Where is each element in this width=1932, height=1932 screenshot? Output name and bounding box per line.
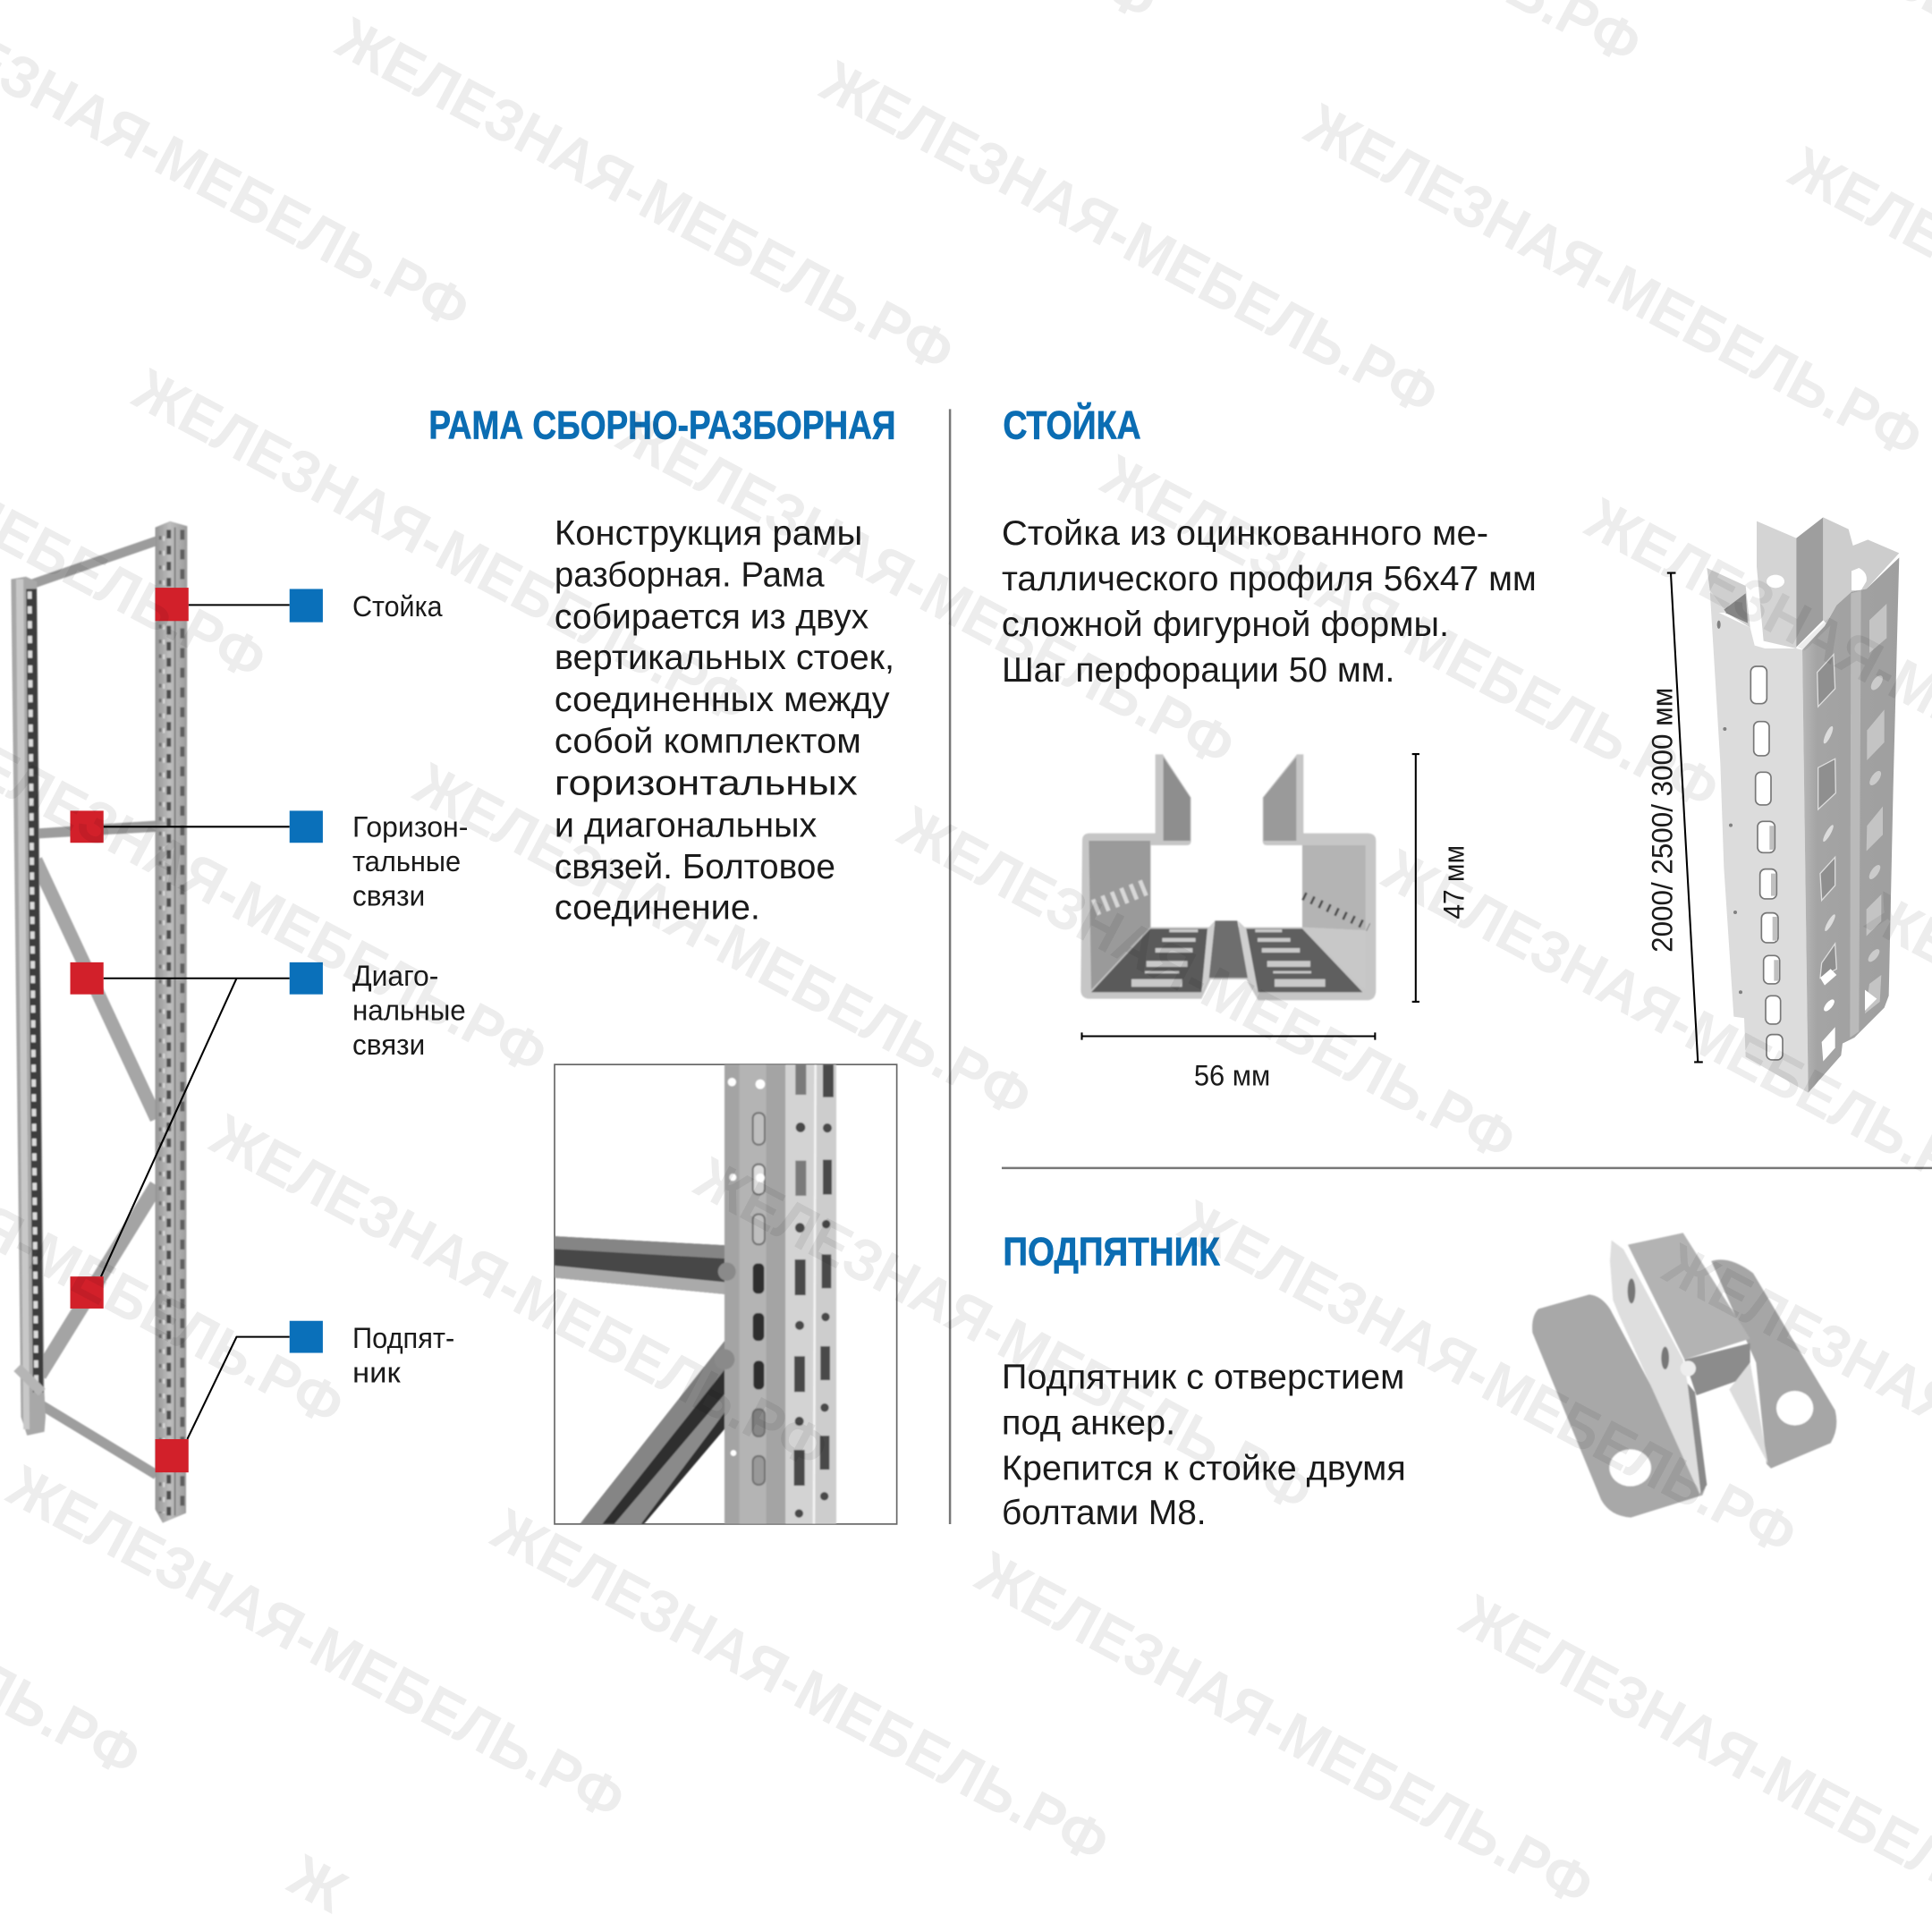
text block: frame description: и диагональных (555, 805, 818, 844)
text block: frame description: собирается из двух (555, 597, 869, 637)
rib (1850, 590, 1861, 1038)
photo: joint close-up (555, 1064, 897, 1524)
text block: upright description: Шаг перфорации 50 мм. (1002, 650, 1394, 690)
watermarks: ЖЕЛЕЗНАЯ-МЕБЕЛЬ.РФ (326, 4, 964, 386)
brace: upper diagonal (36, 860, 157, 1119)
side strip (1688, 1384, 1707, 1494)
left flange (1164, 758, 1191, 841)
text block: upright description: Стойка из оцинкованного ме- (1002, 513, 1488, 553)
text block: upright description: таллического профиля 56х47 мм (1002, 559, 1537, 598)
watermarks: ЖЕЛЕЗНАЯ-МЕБЕЛЬ.РФ (481, 1496, 1120, 1877)
illustration: assembled frame (11, 521, 187, 1523)
inner corner wall (1796, 517, 1823, 647)
label: diagonal braces: Диаго- (352, 960, 438, 992)
right flange (1264, 758, 1296, 841)
label: base plate (352, 1322, 454, 1389)
text block: frame description: разборная. Рама (555, 555, 825, 595)
text block: base plate description (1002, 1358, 1406, 1532)
slot shading (1769, 826, 1779, 981)
diagonal (580, 1341, 726, 1524)
outer channel (1080, 754, 1376, 1000)
text block: base plate description: под анкер. (1002, 1402, 1175, 1442)
watermarks: ЖЕЛЕЗНАЯ-МЕБЕЛЬ.РФ (887, 793, 1526, 1175)
label: horizontal braces (352, 810, 468, 912)
divider: vertical (949, 409, 951, 1524)
dimension: width: 56 мм (1194, 1060, 1270, 1092)
label: diagonal braces: связи (352, 1029, 425, 1061)
text block: frame description (555, 513, 894, 928)
illustration: base plate (1532, 1233, 1836, 1518)
small dots (1717, 621, 1742, 994)
brace: horizontal (27, 820, 157, 839)
label: base plate: ник (352, 1357, 402, 1389)
text block: frame description: соединенных между (555, 680, 890, 719)
beam (555, 1236, 726, 1294)
dimension: width (1081, 1032, 1375, 1092)
watermarks: Ж (277, 1842, 358, 1927)
watermarks: ЖЕЛЕЗНАЯ-МЕБЕЛЬ.РФ (965, 1538, 1604, 1920)
central rib (1209, 920, 1248, 978)
text block: upright description: сложной фигурной формы. (1002, 605, 1449, 644)
watermarks: ЖЕЛЕЗНАЯ-МЕБЕЛЬ.РФ (1168, 1188, 1808, 1569)
label: diagonal braces (352, 960, 466, 1061)
text block: base plate description: болтами М8. (1002, 1493, 1207, 1532)
blue markers (290, 589, 323, 1353)
dimension: height (1646, 573, 1703, 1062)
right wall (1302, 845, 1366, 930)
divider: horizontal (1002, 1167, 1932, 1169)
floor slots (1131, 929, 1326, 987)
text block: frame description: связей. Болтовое (555, 847, 835, 886)
back right wall (1823, 517, 1899, 623)
watermarks: ЖЕЛЕЗНАЯ-МЕБЕЛЬ.РФ (403, 750, 1042, 1131)
watermarks: ЖЕЛЕЗНАЯ-МЕБЕЛЬ.РФ (0, 1453, 636, 1835)
right plate (1711, 1259, 1836, 1469)
left wall (1089, 841, 1150, 990)
bolts (718, 1263, 736, 1281)
brace: bottom (40, 1404, 157, 1475)
underside (1684, 1343, 1750, 1395)
slots on front face (1750, 666, 1783, 1060)
post faces (724, 1064, 785, 1524)
text block: frame description: соединение. (555, 888, 760, 928)
right post (156, 521, 187, 1523)
dimension: depth: 47 мм (1438, 845, 1470, 919)
label: horizontal braces: Горизон- (352, 810, 468, 843)
watermarks: ЖЕЛЕЗНАЯ-МЕБЕЛЬ.РФ (684, 1145, 1323, 1526)
left flange (1707, 568, 1750, 628)
brace: top (25, 536, 157, 589)
brace: lower diagonal (39, 1185, 157, 1375)
round and square holes (756, 1080, 765, 1089)
illustration: profile cross-section (1080, 754, 1376, 1000)
left plate (1532, 1294, 1706, 1518)
watermarks: ЖЕЛЕЗНАЯ-МЕБЕЛЬ.РФ (1091, 442, 1730, 824)
back left wall (1757, 521, 1796, 648)
heading: frame: РАМА СБОРНО-РАЗБОРНАЯ (428, 403, 895, 447)
watermarks: ЖЕЛЕЗНАЯ-МЕБЕЛЬ.РФ (809, 48, 1449, 429)
label: horizontal braces: тальные (352, 845, 461, 877)
text block: frame description: Конструкция рамы (555, 513, 862, 553)
illustration: upright column (1707, 517, 1899, 1093)
heading: upright: СТОЙКА (1003, 402, 1141, 447)
bolts (1628, 1278, 1635, 1303)
red markers (71, 588, 189, 1472)
watermarks: ЖЕЛЕЗНАЯ-МЕБЕЛЬ.РФ (200, 1101, 839, 1483)
text block: frame description: собой комплектом (555, 722, 861, 761)
white through-holes (1820, 969, 1877, 1062)
text block: frame description: вертикальных стоек, (555, 638, 894, 677)
text block: base plate description: Крепится к стойке двумя (1002, 1448, 1406, 1487)
label: diagonal braces: нальные (352, 995, 466, 1027)
left post (11, 577, 46, 1436)
left face (1710, 590, 1809, 1093)
dimension: depth (1412, 754, 1470, 1002)
right face (1802, 557, 1899, 1093)
watermarks: ЖЕЛЕЗНАЯ-МЕБЕЛЬ.РФ (606, 399, 1245, 781)
right gusset (1729, 1362, 1768, 1464)
text block: frame description: горизонтальных (555, 764, 858, 803)
label: upright: Стойка (352, 590, 443, 623)
leader lines (101, 605, 290, 1439)
rectangular holes, outer column (1865, 604, 1886, 1013)
slots front (753, 1113, 765, 1485)
label: base plate: Подпят- (352, 1322, 454, 1354)
dimension: height: 2000/ 2500/ 3000 мм (1646, 688, 1678, 953)
left gusset (1610, 1241, 1707, 1494)
text block: base plate description: Подпятник с отверстием (1002, 1358, 1404, 1397)
heading: base plate: ПОДПЯТНИК (1003, 1231, 1220, 1275)
floor (1091, 928, 1208, 992)
text block: upright description (1002, 513, 1537, 690)
back panel (1628, 1233, 1750, 1360)
slanted small holes (1821, 674, 1885, 963)
watermarks: ЖЕЛЕЗНАЯ-МЕБЕЛЬ.РФ (123, 356, 761, 738)
wall perforation (1094, 886, 1149, 908)
rectangular holes, inner column (1818, 655, 1836, 978)
label: horizontal braces: связи (352, 880, 425, 912)
